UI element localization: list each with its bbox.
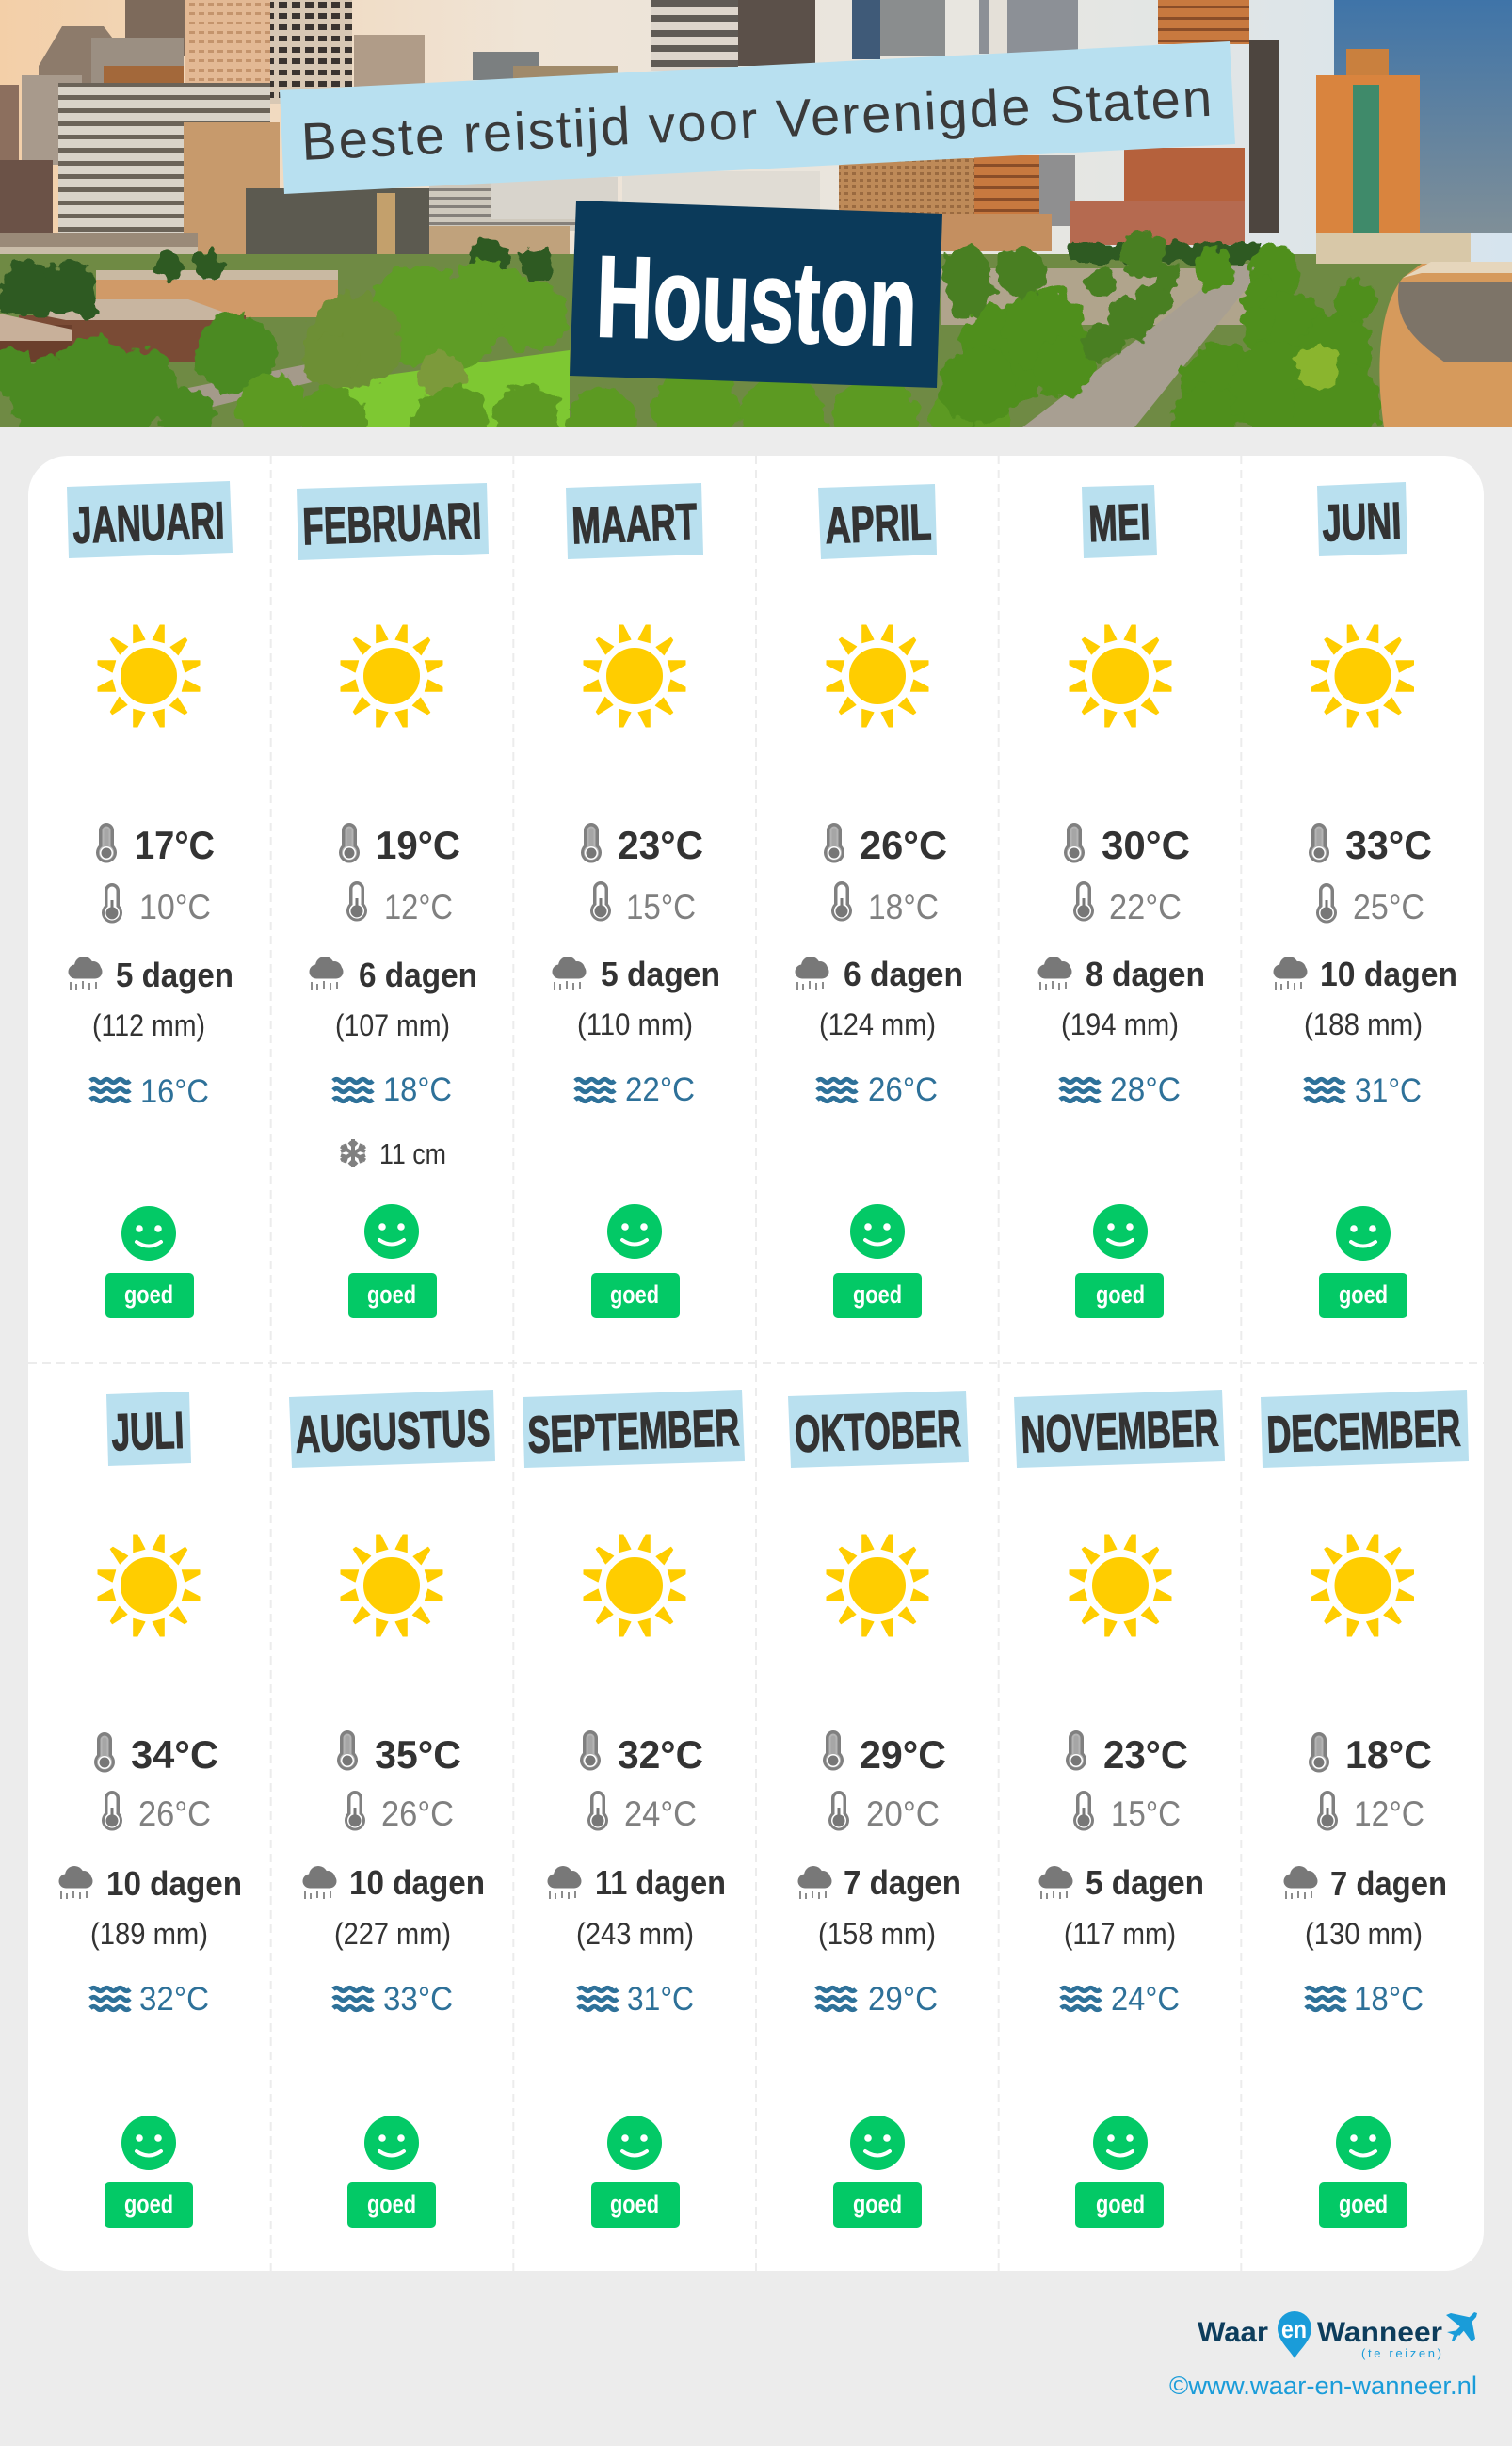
rating: goed: [367, 2190, 416, 2218]
sea temperature: 26°C: [868, 1071, 938, 1108]
month label: OKTOBER: [794, 1399, 962, 1463]
sea temperature: 33°C: [383, 1981, 453, 2018]
sea temperature: 31°C: [627, 1981, 694, 2018]
rain days: [68, 956, 233, 994]
sea temperature: [575, 1071, 695, 1108]
min temperature: [828, 1791, 940, 1833]
icon: sun: [1070, 625, 1171, 727]
month label: [1317, 482, 1407, 556]
sea temperature: [333, 1071, 452, 1108]
rainfall: (112 mm): [92, 1008, 205, 1042]
rain days: 5 dagen: [601, 955, 720, 993]
min temperature: 24°C: [624, 1794, 697, 1833]
icon: sun: [584, 625, 685, 727]
month label: JUNI: [1321, 491, 1402, 552]
min temperature: [831, 881, 939, 926]
max temperature: [1066, 1730, 1188, 1777]
rain days: 7 dagen: [1330, 1864, 1447, 1903]
sea temperature: [578, 1981, 694, 2018]
city name: Houston: Houston: [594, 233, 919, 371]
calendar card: [28, 456, 1484, 2271]
sea temperature: [333, 1981, 453, 2018]
sea temperature: 16°C: [140, 1073, 209, 1110]
sea temperature: [817, 1071, 938, 1108]
min temperature: 12°C: [384, 888, 453, 926]
sea temperature: 28°C: [1110, 1071, 1181, 1108]
min temperature: 26°C: [381, 1794, 454, 1833]
title text: Beste reistijd voor Verenigde Staten: [300, 68, 1213, 171]
month label: NOVEMBER: [1020, 1398, 1219, 1464]
month label: MEI: [1087, 492, 1150, 553]
month label: MAART: [571, 492, 698, 555]
icon: sun: [1070, 1535, 1171, 1636]
sea temperature: 31°C: [1355, 1072, 1422, 1109]
rainfall: (117 mm): [1064, 1917, 1176, 1951]
month label: [523, 1390, 745, 1468]
min temperature: [1317, 1791, 1424, 1833]
max temperature: [823, 1730, 946, 1777]
title banner: [280, 41, 1235, 194]
rating: [1319, 1206, 1407, 1318]
max temperature: [96, 823, 215, 867]
min temperature: 20°C: [866, 1794, 940, 1833]
icon: sun: [98, 625, 200, 727]
min temperature: [1316, 883, 1424, 926]
panel: september: [523, 1390, 745, 2228]
sea temperature: [1306, 1981, 1424, 2018]
sea temperature: [90, 1073, 209, 1110]
panel: oktober: [788, 1391, 969, 2228]
panel: juni: [1273, 482, 1457, 1318]
month label: [818, 484, 937, 559]
rating: goed: [367, 1280, 416, 1309]
rating: [348, 1204, 437, 1318]
min temperature: 12°C: [1354, 1794, 1424, 1833]
rating: [1075, 2116, 1164, 2228]
logo: Waar en Wanneer: (te reizen): [1361, 2346, 1441, 2360]
min temperature: 15°C: [626, 888, 696, 926]
sea temperature: [90, 1981, 209, 2018]
rain days: [798, 1863, 961, 1902]
month label: APRIL: [824, 492, 932, 555]
month label: [566, 483, 703, 559]
max temperature: 19°C: [376, 823, 460, 867]
icon: airplane: [1446, 2312, 1477, 2341]
rating: goed: [1096, 2190, 1145, 2218]
rain days: 8 dagen: [1086, 955, 1205, 993]
sea temperature: 29°C: [868, 1981, 938, 2018]
panel: maart: [552, 483, 720, 1318]
rating: [347, 2116, 436, 2228]
sea temperature: 32°C: [139, 1981, 209, 2018]
rainfall: (110 mm): [577, 1007, 693, 1041]
icon: map pin: [1278, 2311, 1311, 2358]
max temperature: [337, 1730, 461, 1777]
rain days: 11 dagen: [595, 1863, 726, 1902]
icon: sun: [827, 625, 928, 727]
rating: [1319, 2116, 1407, 2228]
icon: sun: [1312, 625, 1414, 727]
rain days: 5 dagen: [116, 956, 233, 994]
month label: [106, 1392, 191, 1466]
min temperature: 26°C: [138, 1794, 211, 1833]
panel: juli: [58, 1392, 242, 2228]
max temperature: [339, 823, 460, 867]
min temperature: [587, 1791, 697, 1833]
min temperature: 15°C: [1111, 1794, 1181, 1833]
max temperature: [1309, 823, 1432, 867]
month label: [297, 483, 489, 560]
rainfall: (124 mm): [819, 1007, 936, 1041]
month label: [289, 1390, 495, 1468]
header photo: Houston skyline: [0, 0, 1512, 462]
min temperature: [1073, 1791, 1181, 1833]
max temperature: 33°C: [1345, 823, 1432, 867]
rainfall: (130 mm): [1305, 1917, 1423, 1951]
max temperature: [581, 823, 703, 867]
rating: [105, 1206, 194, 1318]
rain days: 10 dagen: [349, 1863, 485, 1902]
rain days: 6 dagen: [359, 956, 477, 994]
rainfall: (107 mm): [335, 1008, 450, 1042]
panel: november: [1014, 1390, 1225, 2228]
rain days: [309, 956, 477, 994]
min temperature: [590, 881, 696, 926]
rainfall: (194 mm): [1061, 1007, 1179, 1041]
panel: augustus: [289, 1390, 495, 2228]
rating: [105, 2116, 193, 2228]
min temperature: 18°C: [868, 888, 939, 926]
snow: 11 cm: [379, 1137, 446, 1170]
rainfall: (243 mm): [576, 1917, 694, 1951]
sea temperature: [1305, 1072, 1422, 1109]
sea temperature: [1061, 1981, 1180, 2018]
panel: april: [795, 484, 963, 1318]
month label: [1082, 485, 1157, 558]
icon: sun: [827, 1535, 928, 1636]
rain days: 7 dagen: [844, 1863, 961, 1902]
icon: map pin: en: [1281, 2315, 1307, 2343]
panel: januari: [67, 481, 233, 1318]
rating: goed: [1096, 1280, 1145, 1309]
icon: sun: [98, 1535, 200, 1636]
rainfall: (189 mm): [90, 1917, 208, 1951]
month label: [67, 481, 233, 558]
rain days: 6 dagen: [844, 955, 963, 993]
max temperature: 34°C: [131, 1732, 218, 1777]
rain days: [1037, 955, 1205, 993]
rating: [1075, 1204, 1164, 1318]
min temperature: [346, 881, 453, 926]
month label: AUGUSTUS: [294, 1398, 491, 1464]
sea temperature: [816, 1981, 938, 2018]
rating: [591, 2116, 680, 2228]
rain days: 5 dagen: [1086, 1863, 1204, 1902]
panel: februari: [297, 483, 489, 1318]
min temperature: 22°C: [1109, 888, 1182, 926]
rating: goed: [1339, 2190, 1388, 2218]
month label: [788, 1391, 969, 1468]
max temperature: 30°C: [1102, 823, 1190, 867]
min temperature: [1073, 881, 1182, 926]
icon: sun: [341, 625, 442, 727]
rating: [833, 2116, 922, 2228]
sea temperature: 24°C: [1111, 1981, 1180, 2018]
rainfall: (158 mm): [818, 1917, 936, 1951]
month label: JULI: [110, 1401, 185, 1461]
rating: goed: [124, 1280, 173, 1309]
icon: sun: [1312, 1535, 1414, 1636]
max temperature: 17°C: [135, 823, 215, 867]
min temperature: 25°C: [1353, 888, 1424, 926]
sea temperature: 22°C: [625, 1071, 695, 1108]
max temperature: 23°C: [618, 823, 703, 867]
rainfall: (227 mm): [334, 1917, 451, 1951]
logo: Waar en Wanneer: Waar: [1198, 2317, 1268, 2348]
max temperature: [1309, 1732, 1432, 1777]
min temperature: [345, 1791, 454, 1833]
rating: goed: [610, 2190, 659, 2218]
month label: JANUARI: [72, 491, 225, 555]
month label: [1014, 1390, 1225, 1468]
max temperature: [580, 1730, 703, 1777]
panel: mei: [1037, 485, 1205, 1318]
rain days: [1039, 1863, 1204, 1902]
min temperature: [102, 1791, 211, 1833]
rain days: [548, 1863, 726, 1902]
rain days: [58, 1864, 242, 1903]
sea temperature: 18°C: [1354, 1981, 1424, 2018]
max temperature: 35°C: [375, 1732, 461, 1777]
rain days: [795, 955, 963, 993]
icon: sun: [341, 1535, 442, 1636]
city name: Houston: [570, 201, 942, 388]
rain days: [1284, 1864, 1447, 1903]
month label: SEPTEMBER: [526, 1398, 740, 1464]
min temperature: [102, 883, 211, 926]
rating: goed: [853, 2190, 902, 2218]
icon: sun: [584, 1535, 685, 1636]
rainfall: (188 mm): [1304, 1007, 1423, 1041]
rating: [833, 1204, 922, 1318]
max temperature: 18°C: [1345, 1732, 1432, 1777]
rating: [591, 1204, 680, 1318]
rain days: 10 dagen: [106, 1864, 242, 1903]
rain days: [552, 955, 720, 993]
rating: goed: [1339, 1280, 1388, 1309]
rating: goed: [124, 2190, 173, 2218]
website url: ©www.waar-en-wanneer.nl: [1169, 2372, 1477, 2400]
max temperature: 32°C: [618, 1732, 703, 1777]
panel: december: [1261, 1390, 1469, 2228]
max temperature: 29°C: [860, 1732, 946, 1777]
max temperature: 26°C: [860, 823, 947, 867]
min temperature: 10°C: [139, 888, 211, 926]
logo: Waar en Wanneer: Wanneer: [1317, 2317, 1442, 2348]
rain days: 10 dagen: [1320, 955, 1457, 993]
snow: [341, 1137, 446, 1170]
sea temperature: [1060, 1071, 1181, 1108]
rating: goed: [610, 1280, 659, 1309]
max temperature: 23°C: [1103, 1732, 1188, 1777]
month label: FEBRUARI: [301, 491, 482, 555]
sea temperature: 18°C: [383, 1071, 452, 1108]
logo: Waar en Wanneer: [1198, 2311, 1477, 2360]
rating: goed: [853, 1280, 902, 1309]
